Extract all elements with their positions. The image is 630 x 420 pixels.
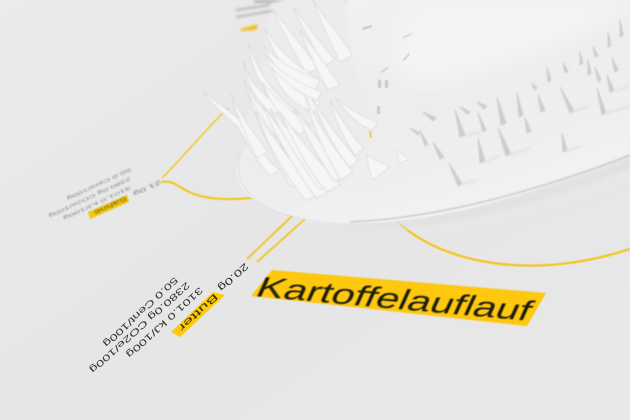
title yellow band: [251, 270, 546, 326]
Butter yellow tag: [171, 292, 225, 337]
far ingredient values: [236, 0, 285, 18]
Butter values: 3101.0 kJ/100g: [124, 285, 205, 360]
dome edge shade: [350, 155, 630, 222]
Butter values: 50.0 Cent/100g: [101, 275, 180, 349]
paper dome: [236, 0, 630, 223]
dome front rim highlight: [300, 135, 630, 222]
ingredient label: Butter: [88, 260, 250, 375]
Butter values: [88, 275, 205, 375]
white paper fibres: [203, 0, 378, 200]
Butter amount: 20.0g: [215, 260, 250, 293]
Sahne values: 50.0 Cent/100g: [65, 167, 132, 202]
yellow connector lines: [161, 6, 630, 266]
dome shadow: [300, 155, 630, 230]
dome left rim: [238, 155, 300, 218]
Butter values: 2380.0g CO2e/100g: [88, 280, 192, 375]
Sahne values: 2380.0g CO2e/100g: [47, 176, 132, 219]
paper spikes: [410, 20, 623, 186]
far ingredient label: [236, 0, 285, 31]
far yellow tag: [240, 24, 258, 31]
ingredient label: Sahne: [47, 167, 162, 221]
Butter name: Butter: [176, 291, 220, 333]
title: [251, 270, 546, 327]
Sahne yellow tag: [88, 195, 129, 219]
yellow glimpses under fibres: [318, 131, 371, 175]
Sahne amount: 21.0g: [131, 178, 162, 197]
title text: Kartoffelauflauf: [251, 272, 538, 327]
Sahne values: 3101.0 kJ/100g: [61, 185, 132, 221]
white paper blocks near fibres: [366, 151, 409, 180]
spike cast shadows: [462, 86, 630, 184]
white paper fibres base: [245, 0, 378, 200]
dome highlight: [396, 0, 630, 85]
Sahne name: Sahne: [91, 194, 128, 215]
slit marks on dome: [362, 25, 412, 114]
Sahne values: [47, 167, 132, 221]
